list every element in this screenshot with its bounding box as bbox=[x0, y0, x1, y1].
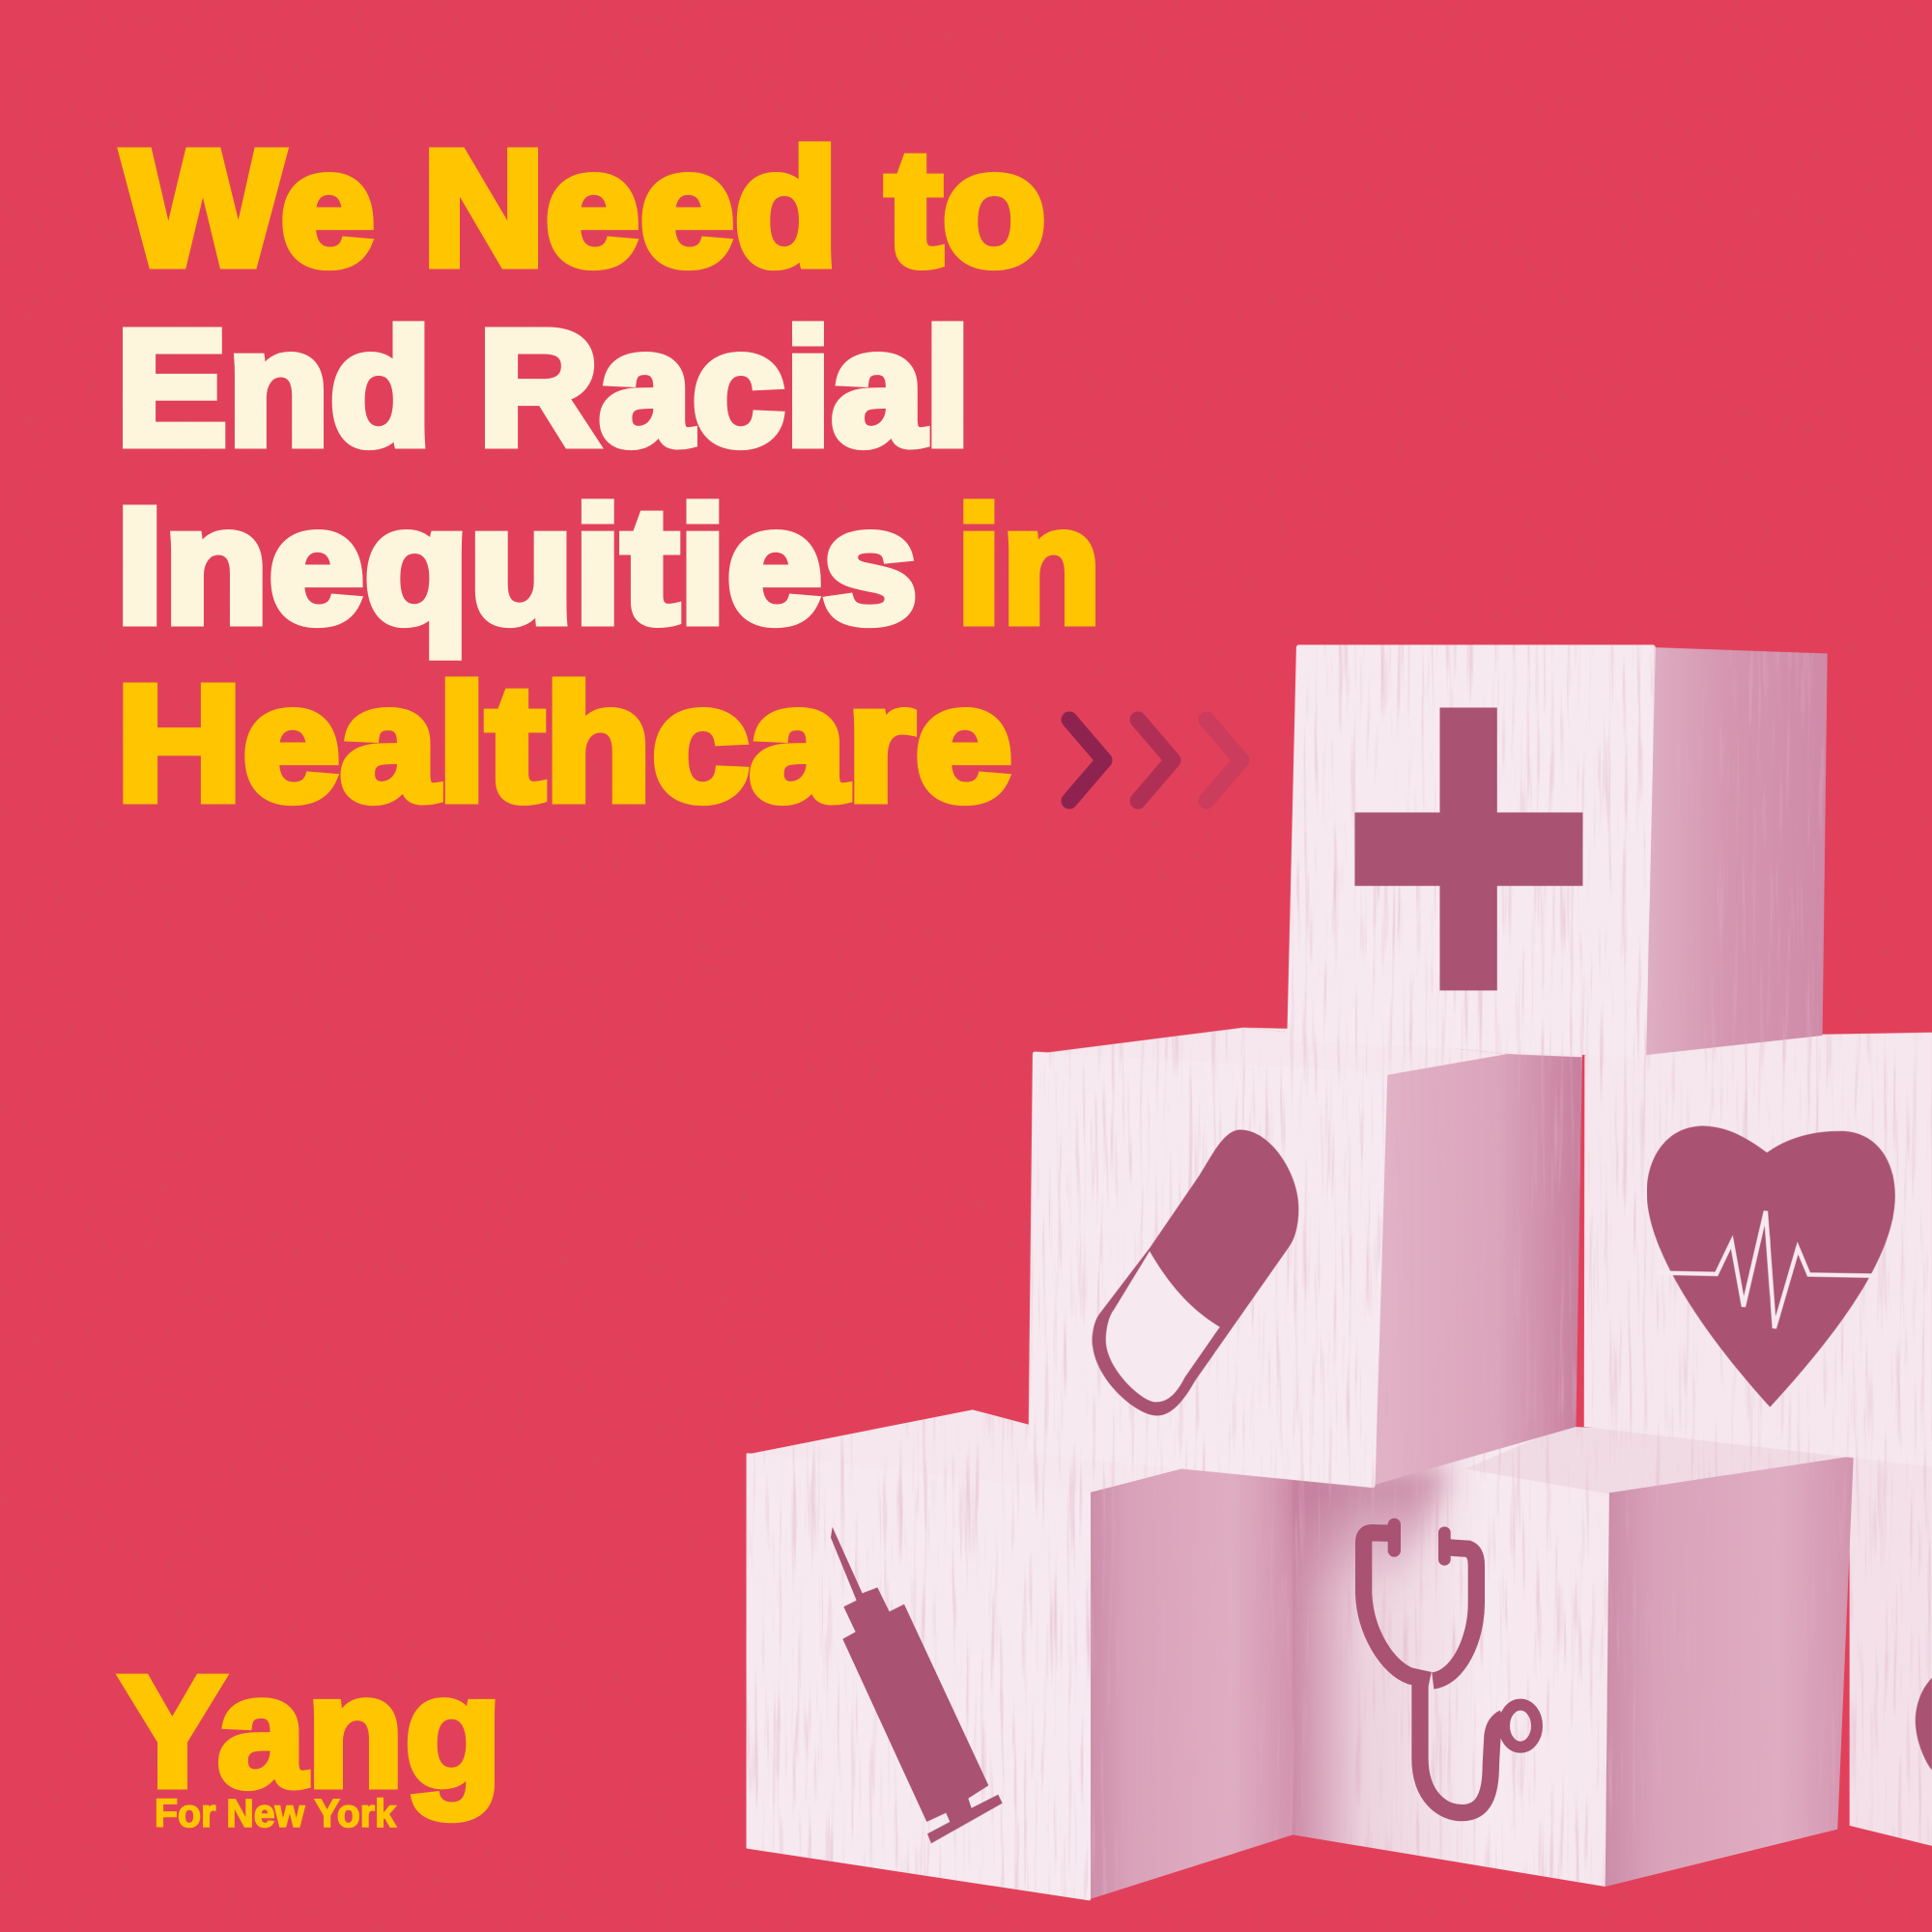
icon: capsule pill bbox=[1093, 1130, 1298, 1415]
upper blocks bbox=[1031, 647, 1932, 1486]
title line 3: Inequities bbox=[116, 474, 918, 658]
arrow: chevrons bbox=[1069, 720, 1241, 801]
logo tagline: For New York bbox=[155, 1791, 396, 1835]
cast shadow under upper blocks bbox=[1293, 1468, 1449, 1594]
illustration: wooden blocks bbox=[749, 647, 1932, 1899]
title bbox=[116, 117, 1101, 836]
bottom row blocks bbox=[749, 1409, 1932, 1899]
title line 1: We Need to bbox=[123, 117, 1046, 300]
logo wordmark: Yang bbox=[119, 1643, 502, 1820]
logo: Yang For New York bbox=[119, 1643, 502, 1835]
icon: syringe bbox=[831, 1527, 1003, 1843]
icon: heart with pulse bbox=[1647, 1126, 1895, 1407]
icon: plus cross bbox=[1354, 708, 1582, 990]
icon: stethoscope bbox=[1364, 1524, 1537, 1813]
icon: partial shape on right block bbox=[1916, 1678, 1932, 1770]
title line 3 accent: in bbox=[956, 474, 1101, 658]
title line 4: Healthcare bbox=[116, 652, 1012, 836]
title line 2: End Racial bbox=[116, 297, 971, 480]
